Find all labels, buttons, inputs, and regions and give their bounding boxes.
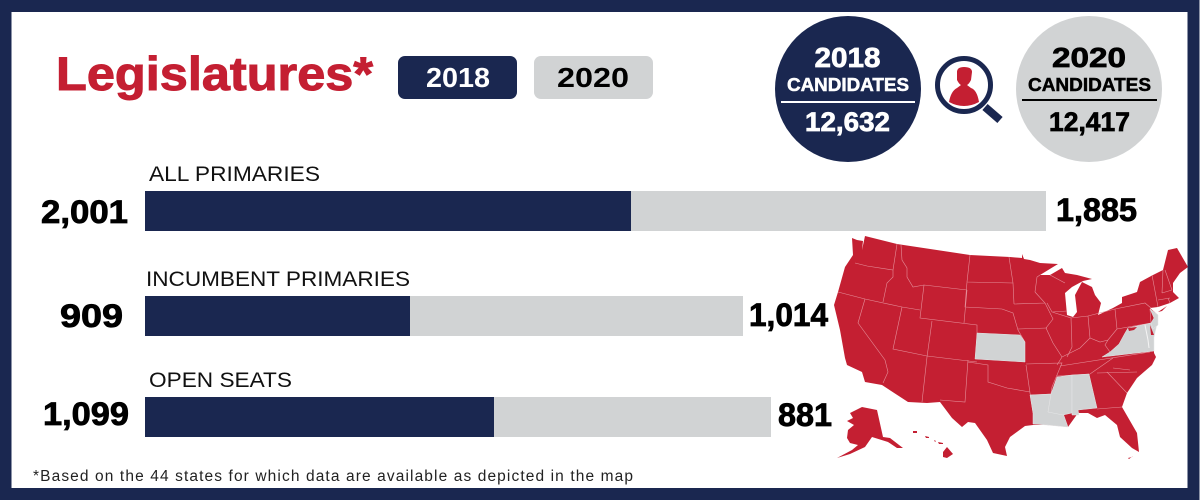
map: Hawaii (913, 431, 953, 458)
chart: all primaries: 1,885 (1056, 192, 1137, 228)
legend: 2018 (398, 56, 517, 99)
badge: 2020 candidates: CANDIDATES (1028, 75, 1151, 95)
chart: incumbent primaries: INCUMBENT PRIMARIES (146, 268, 410, 291)
chart: incumbent primaries: 1,014 (749, 297, 828, 333)
footnote: *Based on the 44 states for which data are available as depicted in the map (33, 468, 633, 485)
chart: open seats (43, 369, 832, 437)
badge: 2018 candidates (775, 16, 921, 162)
badge: 2020 candidates: 12,417 (1049, 107, 1130, 137)
chart: open seats: OPEN SEATS (149, 369, 292, 392)
map: Florida Keys (1128, 456, 1133, 459)
chart: all primaries: 2,001 (41, 194, 128, 230)
title: Legislatures* (56, 47, 374, 100)
chart: open seats: 881 (778, 397, 832, 433)
map: Maryland panhandle and Delaware (1128, 325, 1154, 335)
map: state borders (838, 244, 1172, 413)
badge: 2020 candidates: 2020 (1052, 42, 1126, 73)
map: contiguous states (834, 236, 1188, 456)
legend: 2020 (534, 56, 653, 99)
map: gray states (975, 309, 1158, 427)
icon: magnifying glass with person (938, 58, 1000, 120)
badge: 2018 candidates: 2018 (814, 42, 880, 73)
chart: all primaries (41, 163, 1137, 231)
map: Alaska (837, 407, 903, 458)
badge: 2018 candidates: CANDIDATES (787, 75, 909, 95)
badge: 2020 candidates (1016, 16, 1162, 162)
badge: 2018 candidates: 12,632 (805, 107, 890, 137)
chart: open seats: 1,099 (43, 396, 129, 432)
map: United States (834, 236, 1188, 459)
chart: incumbent primaries: 909 (60, 298, 123, 334)
legend: 2018: 2018 (426, 62, 490, 93)
map: Chesapeake Bay (1145, 325, 1149, 348)
map: Long Island (1158, 306, 1167, 312)
legend: 2020: 2020 (557, 62, 629, 93)
chart: all primaries: ALL PRIMARIES (149, 163, 320, 186)
chart: incumbent primaries (60, 268, 828, 336)
